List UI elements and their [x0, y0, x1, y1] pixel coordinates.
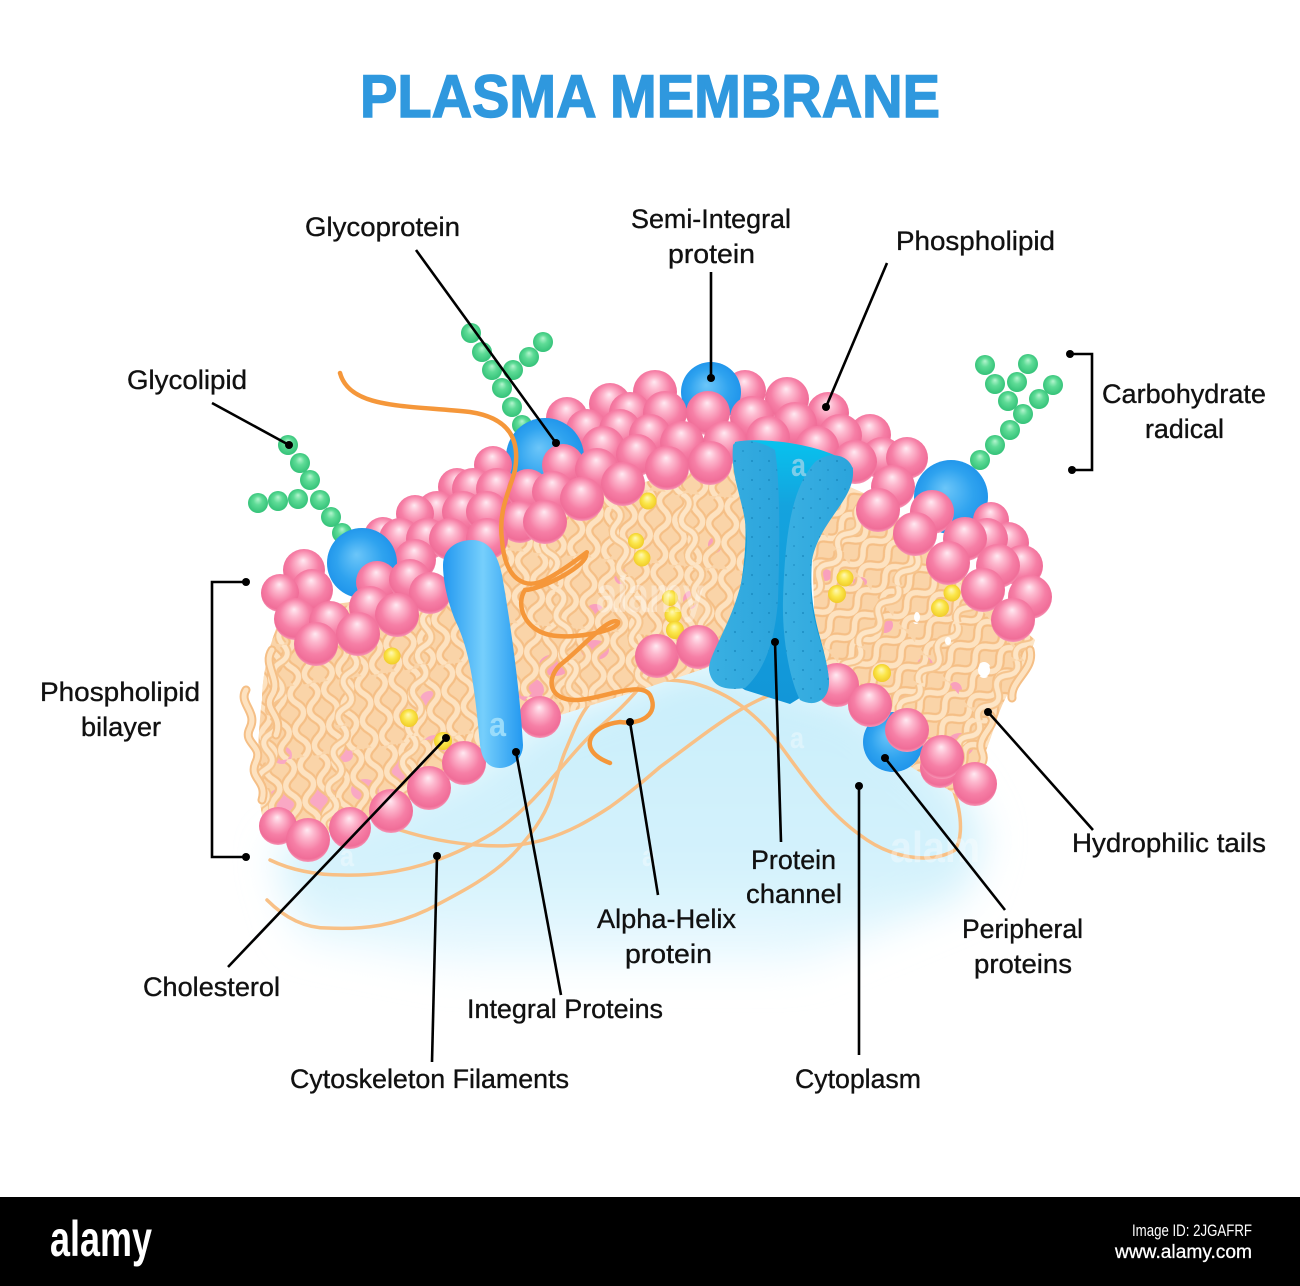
carbohydrate chain: glycolipid [248, 435, 352, 543]
label: Carbohydrate radical [1066, 350, 1266, 474]
label: Glycoprotein: Glycoprotein [305, 212, 460, 242]
channel left lobe [709, 441, 779, 689]
cytoskeleton filaments [267, 680, 960, 928]
channel right lobe [783, 455, 853, 703]
footer bar: www.alamy.com [1114, 1242, 1252, 1263]
footer bar [0, 1197, 1300, 1286]
peripheral protein [863, 712, 923, 772]
label: Phospholipid bilayer: Phospholipid [40, 677, 200, 707]
glycoprotein [506, 418, 584, 496]
label: Integral Proteins: Integral Proteins [467, 994, 663, 1024]
label: Alpha-Helix protein [597, 718, 736, 969]
label: Protein channel: Protein [751, 845, 836, 875]
alpha-helix protein [340, 373, 653, 763]
cytoplasm [275, 660, 985, 965]
footer bar: alamy [50, 1211, 152, 1267]
label: Semi-Integral protein: protein [668, 239, 755, 269]
label: Cytoskeleton Filaments [290, 852, 569, 1094]
phospholipid tails: right [810, 470, 1035, 800]
cholesterol molecules [384, 492, 960, 750]
label: Cholesterol [143, 734, 450, 1002]
carbohydrate chain: glycoprotein [461, 323, 553, 435]
protein channel [709, 440, 853, 704]
phospholipid tails: middle [450, 460, 760, 730]
watermarks: a [790, 722, 804, 755]
glycolipid protein head [327, 528, 397, 598]
watermarks: alamy [596, 567, 704, 623]
label: Alpha-Helix protein: protein [625, 939, 712, 969]
integral protein, right [914, 460, 988, 534]
label: Glycoprotein [305, 212, 560, 447]
phospholipid tails: left [258, 590, 515, 840]
footer bar: Image ID: 2JGAFRF [1132, 1221, 1252, 1240]
upper phospholipid heads with embedded proteins [261, 362, 1052, 666]
label: Carbohydrate radical: radical [1145, 414, 1224, 444]
protein channel: a [791, 447, 806, 483]
label: Phospholipid bilayer: bilayer [81, 712, 161, 742]
watermarks: alam [890, 823, 980, 872]
label: Cytoplasm [795, 782, 921, 1094]
loose tails at membrane edges [244, 650, 1031, 800]
label: Protein channel [746, 638, 842, 909]
watermarks: a [340, 840, 354, 873]
label: Phospholipid: Phospholipid [896, 226, 1055, 256]
label: Peripheral proteins: Peripheral [962, 914, 1083, 944]
label: Hydrophilic tails [984, 708, 1266, 858]
lower phospholipid heads and peripheral protein [259, 625, 997, 862]
label: Cholesterol: Cholesterol [143, 972, 280, 1002]
label: Peripheral proteins: proteins [974, 949, 1072, 979]
semi-integral protein [681, 362, 741, 422]
label: Cytoplasm: Cytoplasm [795, 1064, 921, 1094]
title: PLASMA MEMBRANE [360, 63, 940, 130]
label: Semi-Integral protein [631, 204, 791, 382]
label: Glycolipid: Glycolipid [127, 365, 247, 395]
label: Phospholipid bilayer [40, 578, 250, 861]
label: Semi-Integral protein: Semi-Integral [631, 204, 791, 234]
label: Alpha-Helix protein: Alpha-Helix [597, 904, 736, 934]
label: Integral Proteins [467, 748, 663, 1024]
integral protein [443, 540, 523, 768]
label: Peripheral proteins [881, 754, 1083, 979]
label: Hydrophilic tails: Hydrophilic tails [1072, 828, 1266, 858]
label: Glycolipid [127, 365, 293, 449]
watermarks [340, 567, 980, 873]
label: Cytoskeleton Filaments: Cytoskeleton Filaments [290, 1064, 569, 1094]
label: Carbohydrate radical: Carbohydrate [1102, 379, 1266, 409]
carbohydrate chain: right [970, 354, 1063, 470]
label: Protein channel: channel [746, 879, 842, 909]
label: Phospholipid [822, 226, 1055, 411]
integral protein: a [489, 706, 507, 744]
watermarks: a [642, 840, 656, 873]
